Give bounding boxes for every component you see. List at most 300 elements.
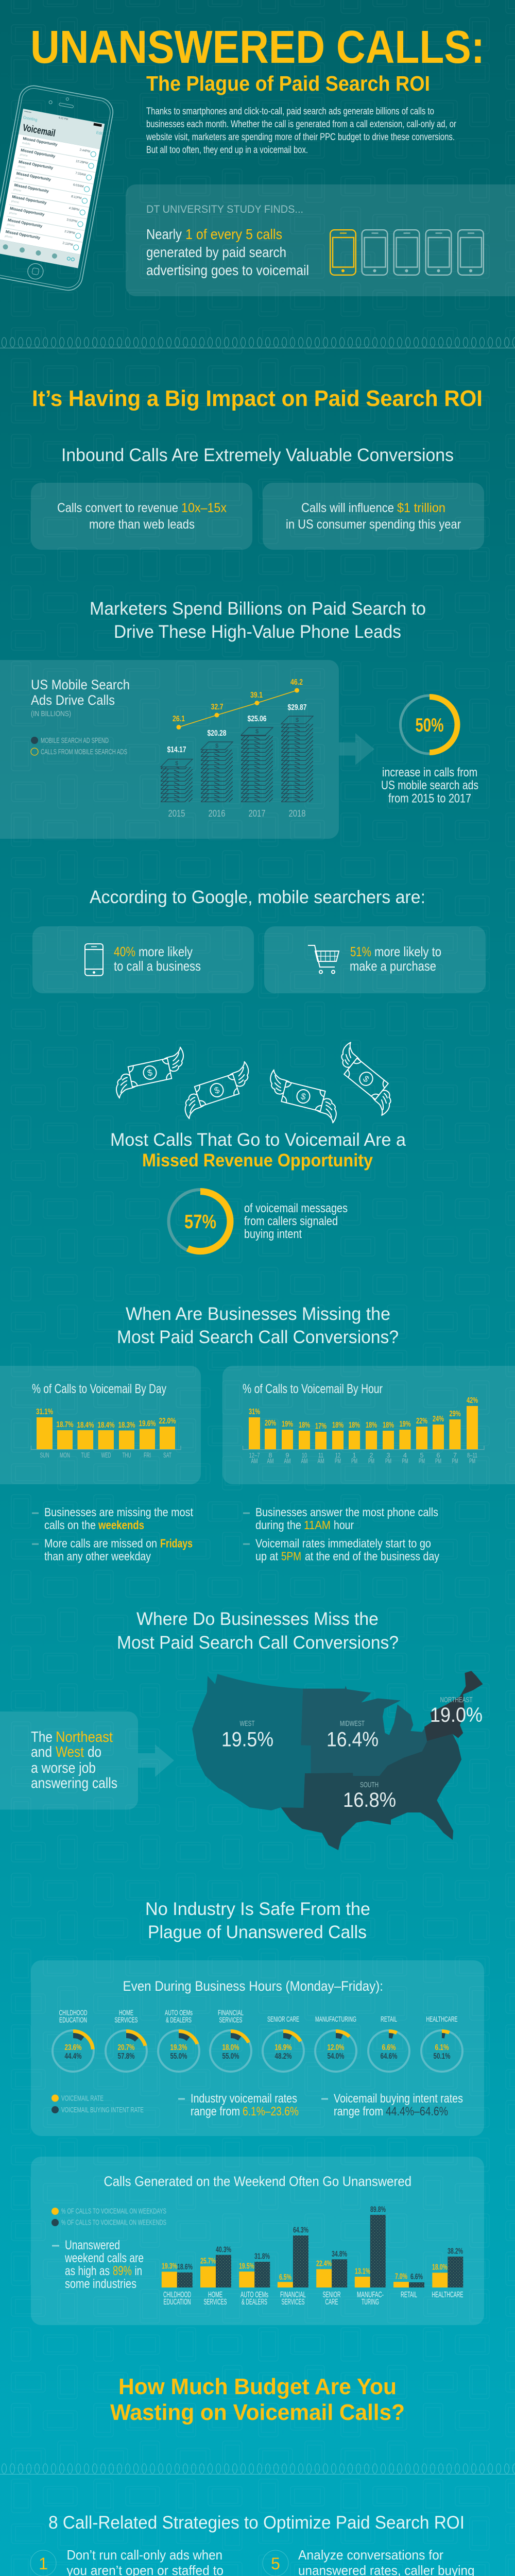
money stack bars: $	[255, 728, 259, 735]
bar chart: by hour: 2	[369, 1451, 373, 1459]
ring: home services: 20.7%	[117, 2043, 135, 2052]
illustration: phone showing voicemail list: phone	[5, 235, 13, 239]
ring: home services	[106, 2008, 147, 2072]
bar chart: by hour: PM	[435, 1457, 441, 1465]
callout: northeast and west: do	[88, 1744, 101, 1760]
intro paragraph: Thanks to smartphones and click-to-call, paid search ads generate billions of calls to	[146, 106, 434, 117]
label: south: SOUTH	[360, 1781, 379, 1789]
bar chart: weekday vs weekend: SERVICES	[281, 2298, 305, 2307]
bar chart: by day: FRI	[144, 1451, 151, 1459]
legend: voicemail rates: VOICEMAIL RATE	[61, 2094, 104, 2103]
label: south: 16.8%	[343, 1789, 396, 1811]
ring: auto OEMs and dealers: & DEALERS	[166, 2016, 192, 2025]
strategy 1	[30, 2547, 224, 2576]
ring: manufacturing	[315, 2015, 356, 2072]
label: northeast: 19.0%	[430, 1704, 483, 1726]
illustration: phone showing voicemail list: phone	[7, 223, 15, 228]
stat caption: of voicemail messages	[244, 1201, 348, 1215]
takeaway: weekend calls: some industries	[65, 2277, 136, 2291]
takeaway: weekend calls: as high as	[65, 2264, 110, 2278]
label: west: 19.5%	[221, 1728, 273, 1751]
chart title: (IN BILLIONS)	[31, 709, 71, 718]
bar chart: weekday vs weekend: 7.0%	[395, 2272, 407, 2281]
takeaway: weekend calls: 89%	[113, 2264, 132, 2278]
bar chart: weekday vs weekend: 89.8%	[370, 2205, 386, 2214]
bar chart: by day: 31.1%	[36, 1408, 53, 1416]
illustration: phone showing voicemail list: phone	[18, 165, 26, 170]
callout: northeast and west: a worse job	[31, 1760, 96, 1776]
bar chart: by hour: PM	[419, 1457, 425, 1465]
line chart: calls from mobile search ads: 39.1	[250, 691, 263, 700]
card: more likely to call: to call a business	[114, 958, 201, 974]
takeaways: by hour: 5PM	[281, 1550, 301, 1563]
takeaway: buying intent range: range from	[334, 2105, 383, 2119]
icon row: 1 of 5 phones highlighted	[330, 230, 484, 275]
illustration: phone showing voicemail list: 2:11PM	[62, 242, 73, 247]
takeaways: by hour: Voicemail rates immediately start to go	[255, 1536, 431, 1550]
bar chart: by hour: 29%	[449, 1410, 461, 1418]
panel: business hours by industry: Even During Business Hours (Monday–Friday):	[123, 1978, 383, 1994]
ring: childhood education: 44.4%	[65, 2052, 82, 2061]
takeaways: by day	[32, 1505, 194, 1563]
illustration: phone showing voicemail list: Missed Opportunity	[21, 148, 56, 159]
bar chart: weekday vs weekend: CARE	[325, 2298, 338, 2307]
bar chart: weekday vs weekend: TURING	[362, 2298, 379, 2307]
bar chart: by day: MON	[60, 1451, 70, 1459]
bar chart: by hour	[243, 1396, 484, 1465]
bar chart: weekday vs weekend: RETAIL	[401, 2291, 417, 2299]
bar chart: by hour: 8	[268, 1451, 272, 1459]
card: more likely to purchase: more likely to	[374, 944, 441, 959]
card: convert to revenue: Calls convert to revenue	[57, 501, 178, 515]
bar chart: by hour: 5	[420, 1451, 424, 1459]
illustration: phone showing voicemail list: Missed Opportunity	[18, 159, 54, 171]
bar chart: by hour: 18%	[349, 1421, 360, 1430]
illustration: phone showing voicemail list: Missed Opportunity	[14, 182, 49, 194]
bar chart: weekday vs weekend: 31.8%	[254, 2252, 270, 2261]
illustration: phone showing voicemail list: 2:29PM	[64, 230, 75, 235]
heading: how much budget: How Much Budget Are You	[118, 2374, 397, 2399]
subtitle: The Plague of Paid Search ROI	[146, 72, 430, 95]
ring: retail: 64.6%	[380, 2052, 398, 2061]
bar chart: by hour: 11	[318, 1451, 323, 1459]
takeaway: weekend calls	[52, 2238, 144, 2291]
stat caption: US mobile search ads	[381, 778, 478, 792]
bar chart: by day: THU	[123, 1451, 131, 1459]
callout: northeast and west: answering calls	[31, 1775, 117, 1792]
legend: voicemail rates	[52, 2094, 144, 2114]
heading: where do businesses miss: Where Do Businesses Miss the	[136, 1608, 379, 1629]
takeaways: by day: calls on the	[44, 1518, 96, 1532]
bar chart: by day: 19.6%	[139, 1419, 156, 1428]
icons: flying money: $	[300, 1091, 307, 1102]
stat caption	[381, 766, 478, 806]
ring: auto OEMs and dealers: 55.0%	[170, 2052, 187, 2061]
bar chart: weekday vs weekend: 40.3%	[216, 2245, 231, 2254]
bar chart: by hour: 42%	[467, 1396, 478, 1405]
bar chart: weekday vs weekend: 19.3%	[162, 2262, 177, 2271]
takeaway: weekend calls: in	[135, 2264, 142, 2278]
bar chart: weekday vs weekend: MANUFAC-	[357, 2291, 384, 2299]
ring: financial services: FINANCIAL	[218, 2008, 244, 2017]
ring: auto OEMs and dealers	[158, 2008, 199, 2072]
intro paragraph: But all too often, they end up in a voicemail box.	[146, 145, 308, 156]
bar chart: weekday vs weekend: EDUCATION	[164, 2298, 191, 2307]
bar chart: by hour: 20%	[265, 1419, 276, 1428]
heading: where do businesses miss: Most Paid Search Call Conversions?	[117, 1632, 399, 1653]
bar chart: weekday vs weekend: 38.2%	[448, 2247, 463, 2256]
bar chart: by hour: PM	[402, 1457, 408, 1465]
bar chart: by day: 22.0%	[159, 1417, 176, 1426]
card: more likely to purchase	[264, 926, 486, 993]
year axis labels: 2018	[288, 808, 306, 819]
spend values: $20.28	[207, 729, 227, 738]
callout: northeast and west: Northeast	[56, 1729, 113, 1745]
bar chart: by hour: PM	[335, 1457, 341, 1465]
bar chart: by hour: AM	[267, 1457, 274, 1465]
icons: flying money: $	[213, 1085, 221, 1096]
takeaways: by day: More calls are missed on	[44, 1536, 157, 1550]
illustration: phone showing voicemail list: 8:11PM	[71, 195, 82, 200]
illustration: phone showing voicemail list: mobile	[22, 142, 30, 146]
stat caption	[244, 1201, 348, 1241]
takeaway: buying intent range	[321, 2092, 463, 2119]
takeaway: voicemail range: Industry voicemail rates	[191, 2092, 297, 2106]
bar chart: by hour: PM	[469, 1457, 475, 1465]
bar chart: by hour: 4	[403, 1451, 407, 1459]
icons: flying money: $	[361, 1074, 371, 1084]
bar chart: by hour: PM	[385, 1457, 391, 1465]
ring: financial services: 55.0%	[222, 2052, 239, 2061]
label: midwest: 16.4%	[327, 1728, 379, 1751]
bar chart: by hour: AM	[251, 1457, 258, 1465]
ring: childhood education: 23.6%	[65, 2043, 82, 2052]
bar chart: by hour: 31%	[249, 1408, 260, 1416]
takeaway: buying intent range: Voicemail buying intent rates	[334, 2092, 463, 2106]
panel: business hours by industry	[31, 1960, 484, 2136]
ring: childhood education	[53, 2008, 94, 2072]
illustration: phone showing voicemail list: Greeting	[23, 115, 38, 122]
strategy 1: Don’t run call-only ads when	[67, 2547, 222, 2563]
illustration: phone showing voicemail list	[0, 83, 115, 293]
legend: weekdays and weekends: % OF CALLS TO VOICEMAIL ON WEEKENDS	[61, 2218, 166, 2227]
card: more likely to call: 40%	[114, 944, 135, 959]
bar chart: by day: SUN	[40, 1451, 49, 1459]
bar chart: by hour: 18%	[332, 1421, 344, 1430]
heading: missed revenue opportunity	[110, 1129, 406, 1171]
heading: no industry is safe	[145, 1899, 370, 1942]
callout: northeast and west: and	[31, 1744, 52, 1760]
takeaway: buying intent range: 44.4%–64.6%	[386, 2105, 448, 2119]
bar chart: by hour: PM	[452, 1457, 458, 1465]
illustration: phone showing voicemail list: 3:52PM	[66, 218, 77, 224]
spend values: $14.17	[167, 745, 186, 754]
panel: US mobile search ads chart	[0, 660, 339, 839]
bar chart: by hour: 10	[302, 1451, 307, 1459]
card: influence spending: in US consumer spending this year	[286, 517, 461, 532]
study statement: generated by paid search	[146, 244, 286, 260]
takeaways: by hour: Businesses answer the most phone calls	[255, 1505, 438, 1519]
money stack bars	[161, 716, 313, 802]
bar chart: by hour: 6	[436, 1451, 440, 1459]
ring: healthcare: 50.1%	[434, 2052, 451, 2061]
bar chart: by hour: 12	[335, 1451, 340, 1459]
intro paragraph	[146, 106, 457, 156]
map: United States regions	[192, 1671, 483, 1850]
card: more likely to call: more likely	[139, 944, 193, 959]
illustration: phone showing voicemail list: •••••	[24, 110, 32, 114]
stat: 57% ring	[169, 1190, 348, 1253]
year axis labels: 2015	[168, 808, 185, 819]
icons: flying money	[110, 1041, 406, 1123]
year axis labels	[168, 808, 306, 819]
ring: financial services	[210, 2008, 251, 2072]
ring: healthcare: 6.1%	[435, 2043, 449, 2052]
ring: senior care: 48.2%	[275, 2052, 292, 2061]
bar chart: weekday vs weekend: 34.8%	[332, 2250, 347, 2259]
takeaway: weekend calls: Unanswered	[65, 2238, 120, 2252]
ring: auto OEMs and dealers: 19.3%	[170, 2043, 187, 2052]
callout: northeast and west: West	[56, 1744, 84, 1760]
heading: inbound calls: Inbound Calls Are Extremely Valuable Conversions	[61, 445, 454, 465]
chart title: Ads Drive Calls	[31, 692, 115, 708]
illustration: phone showing voicemail list: Edit	[96, 130, 103, 136]
bar chart: by hour: 17%	[315, 1422, 327, 1431]
stat caption: buying intent	[244, 1227, 302, 1241]
card: convert to revenue	[31, 483, 252, 550]
line chart: calls from mobile search ads	[173, 678, 303, 730]
bar chart: by hour: 8–11	[467, 1451, 477, 1459]
illustration: phone showing voicemail list: phone	[15, 177, 24, 181]
heading: how much budget: Wasting on Voicemail Calls?	[110, 2400, 405, 2425]
illustration: phone showing voicemail list: 7:33AM	[75, 172, 86, 177]
ring: childhood education: CHILDHOOD	[59, 2008, 88, 2017]
bar chart: weekday vs weekend: 6.5%	[279, 2273, 291, 2282]
money stack bars: $	[215, 743, 218, 749]
card: more likely to purchase: 51%	[350, 944, 371, 959]
illustration: phone showing voicemail list: Missed Opportunity	[5, 229, 41, 240]
takeaways: by hour	[243, 1505, 439, 1563]
bar chart: weekday vs weekend: 18.6%	[177, 2263, 193, 2272]
stat caption: from 2015 to 2017	[388, 791, 471, 806]
bar chart: by hour: 22%	[416, 1417, 427, 1426]
illustration: phone showing voicemail list: 4:22 PM	[58, 116, 68, 121]
takeaways: by day: than any other weekday	[44, 1550, 151, 1563]
panel: weekend calls: Calls Generated on the Weekend Often Go Unanswered	[104, 2174, 411, 2189]
bar chart: weekday vs weekend: HOME	[208, 2291, 222, 2299]
callout: northeast and west	[0, 1711, 138, 1809]
panel: calls to voicemail by day: % of Calls to Voicemail By Day	[32, 1382, 166, 1396]
takeaways: by hour: up at	[255, 1550, 279, 1563]
bar chart: weekday vs weekend	[162, 2205, 464, 2307]
illustration: phone showing voicemail list: phone	[11, 200, 19, 205]
spend values: $25.06	[247, 715, 267, 723]
bar chart: by hour: PM	[368, 1457, 374, 1465]
heading: when are businesses missing	[117, 1303, 399, 1347]
bar chart: weekday vs weekend: 18.0%	[432, 2263, 448, 2272]
heading: marketers spend: Marketers Spend Billions on Paid Search to	[90, 598, 426, 619]
bar chart: by hour: AM	[317, 1457, 324, 1465]
illustration: phone showing voicemail list: Voicemail	[22, 123, 56, 139]
bar chart: by hour: AM	[301, 1457, 308, 1465]
spend values	[167, 703, 307, 754]
study statement: 1 of every 5 calls	[185, 226, 282, 242]
illustration: phone showing voicemail list: phone	[9, 211, 17, 216]
bar chart: by hour: 18%	[383, 1421, 394, 1430]
bar chart: by hour: 19%	[282, 1420, 293, 1429]
bar chart: weekday vs weekend: SENIOR	[322, 2291, 341, 2299]
label: west	[221, 1719, 273, 1751]
chart title	[31, 677, 130, 718]
bar chart: weekday vs weekend: FINANCIAL	[280, 2291, 306, 2299]
panel: calls to voicemail by hour	[222, 1366, 515, 1484]
label: northeast: NORTHEAST	[440, 1696, 473, 1704]
card: influence spending: Calls will influence	[301, 501, 394, 515]
bar chart: by day: 18.3%	[118, 1421, 135, 1430]
chart title: US Mobile Search	[31, 677, 130, 692]
ring: senior care	[263, 2015, 304, 2072]
card: influence spending: $1 trillion	[397, 501, 445, 515]
bar chart: by day: 18.7%	[57, 1420, 74, 1429]
region: northeast	[424, 1671, 483, 1741]
line chart: calls from mobile search ads: 46.2	[290, 678, 303, 687]
takeaways: by day: Businesses are missing the most	[44, 1505, 194, 1519]
bar chart: by hour: AM	[284, 1457, 290, 1465]
panel: calls to voicemail by day	[0, 1366, 201, 1484]
legend: weekdays and weekends	[52, 2207, 166, 2227]
takeaways: by day: weekends	[98, 1518, 144, 1532]
illustration: phone showing voicemail list: Missed Opportunity	[16, 171, 52, 182]
illustration: phone showing voicemail list: Missed Opportunity	[10, 206, 45, 217]
ring: financial services: 18.0%	[222, 2043, 239, 2052]
heading: when are businesses missing: Most Paid Search Call Conversions?	[117, 1327, 399, 1347]
bar chart: by hour: 9	[285, 1451, 289, 1459]
takeaways: by hour: hour	[334, 1518, 354, 1532]
bar chart: weekday vs weekend: 22.4%	[316, 2260, 332, 2268]
illustration: phone showing voicemail list: 4:38PM	[68, 207, 79, 212]
label: south	[343, 1781, 396, 1811]
takeaways: by hour: 11AM	[304, 1518, 331, 1532]
label: midwest	[327, 1719, 379, 1751]
bar chart: weekday vs weekend: AUTO OEMs	[241, 2291, 268, 2299]
section heading: impact: It’s Having a Big Impact on Paid Search ROI	[32, 386, 483, 411]
label: northeast	[430, 1696, 483, 1726]
strategy 5: Analyze conversations for	[298, 2547, 443, 2563]
line chart: calls from mobile search ads: 32.7	[211, 703, 224, 711]
line chart: calls from mobile search ads: 26.1	[173, 715, 185, 723]
arrow: chart to stat	[339, 733, 374, 765]
ring: home services: HOME	[119, 2008, 133, 2017]
illustration: phone showing voicemail list: phone	[20, 153, 28, 158]
study statement	[146, 226, 309, 278]
ring: auto OEMs and dealers: AUTO OEMs	[165, 2008, 193, 2017]
bar chart: weekday vs weekend: HEALTHCARE	[432, 2291, 464, 2299]
heading: 8 strategies: 8 Call-Related Strategies to Optimize Paid Search ROI	[48, 2512, 465, 2533]
legend: weekdays and weekends: % OF CALLS TO VOICEMAIL ON WEEKDAYS	[61, 2207, 166, 2215]
bar chart: by hour: 18%	[299, 1421, 310, 1430]
ring: manufacturing: 54.0%	[328, 2052, 345, 2061]
heading: according to Google: According to Google, mobile searchers are:	[90, 887, 425, 907]
bar chart: by hour: 18%	[366, 1421, 377, 1430]
ring: senior care: SENIOR CARE	[267, 2015, 299, 2024]
strategy 5	[263, 2547, 475, 2576]
label: west: WEST	[240, 1719, 254, 1728]
stat: 50% ring	[381, 696, 478, 806]
stat: 50% ring: 50%	[415, 715, 444, 736]
heading: how much budget	[110, 2374, 405, 2425]
heading: missed revenue opportunity: Most Calls That Go to Voicemail Are a	[110, 1129, 406, 1150]
bar chart: by hour: PM	[351, 1457, 357, 1465]
legend	[31, 736, 127, 756]
illustration: phone showing voicemail list: 6:03AM	[73, 183, 84, 189]
bar chart: by day: WED	[101, 1451, 111, 1459]
heading: missed revenue opportunity: Missed Revenue Opportunity	[142, 1150, 373, 1171]
label: midwest: MIDWEST	[340, 1719, 365, 1728]
takeaway: weekend calls: weekend calls are	[64, 2251, 144, 2265]
takeaway: voicemail range: 6.1%–23.6%	[243, 2105, 299, 2119]
bar chart: weekday vs weekend: 6.6%	[410, 2273, 423, 2281]
strategy 5: 5	[271, 2554, 280, 2573]
panel: weekend calls	[31, 2157, 484, 2325]
heading: no industry is safe: Plague of Unanswered Calls	[148, 1922, 367, 1942]
ring: retail	[368, 2015, 409, 2072]
money stack bars: $	[175, 760, 178, 767]
card: convert to revenue: 10x–15x	[181, 501, 227, 515]
heading: marketers spend	[90, 598, 426, 642]
icons: flying money: $	[146, 1067, 153, 1078]
region: midwest	[301, 1686, 427, 1776]
icon: shopping cart	[308, 945, 339, 974]
illustration: phone showing voicemail list: Missed Opportunity	[12, 194, 47, 205]
illustration: phone showing voicemail list: phone	[13, 188, 22, 193]
bar chart: by day: SAT	[163, 1451, 171, 1459]
stat caption: increase in calls from	[382, 766, 477, 779]
legend: voicemail rates: VOICEMAIL BUYING INTENT RATE	[61, 2106, 144, 2114]
ring: manufacturing: MANUFACTURING	[315, 2015, 356, 2024]
strategy 1: 1	[39, 2554, 48, 2573]
card: more likely to call	[32, 926, 254, 993]
heading: when are businesses missing: When Are Businesses Missing the	[126, 1303, 390, 1324]
bar chart: by hour: 12–7	[249, 1451, 260, 1459]
takeaways: by hour: during the	[255, 1518, 301, 1532]
year axis labels: 2016	[208, 808, 226, 819]
ring: healthcare	[421, 2015, 462, 2072]
takeaway: voicemail range	[178, 2092, 299, 2119]
bar chart: by hour: 24%	[433, 1415, 444, 1423]
card: convert to revenue: more than web leads	[89, 517, 195, 532]
year axis labels: 2017	[248, 808, 266, 819]
takeaways: by day: Fridays	[160, 1536, 193, 1550]
bar chart: by day	[31, 1408, 181, 1459]
card: more likely to purchase: make a purchase	[350, 958, 436, 974]
region: south	[281, 1734, 461, 1850]
bar chart: by hour: 1	[352, 1451, 356, 1459]
bar chart: weekday vs weekend: 25.7%	[200, 2257, 216, 2265]
card: influence spending	[263, 483, 484, 550]
bar chart: by hour: 3	[386, 1451, 390, 1459]
ring: retail: RETAIL	[381, 2015, 397, 2024]
bar chart: weekday vs weekend: 19.5%	[239, 2262, 254, 2270]
takeaway: voicemail range: range from	[191, 2105, 240, 2119]
ring: childhood education: EDUCATION	[59, 2016, 87, 2025]
study statement: advertising goes to voicemail	[146, 262, 309, 278]
ring: home services: 57.8%	[117, 2052, 135, 2061]
bar chart: by hour: 7	[453, 1451, 457, 1459]
heading: where do businesses miss	[117, 1608, 399, 1653]
study eyebrow: DT UNIVERSITY STUDY FINDS...	[146, 204, 303, 215]
region: west	[192, 1674, 311, 1810]
panel: calls to voicemail by hour: % of Calls to Voicemail By Hour	[243, 1382, 383, 1396]
